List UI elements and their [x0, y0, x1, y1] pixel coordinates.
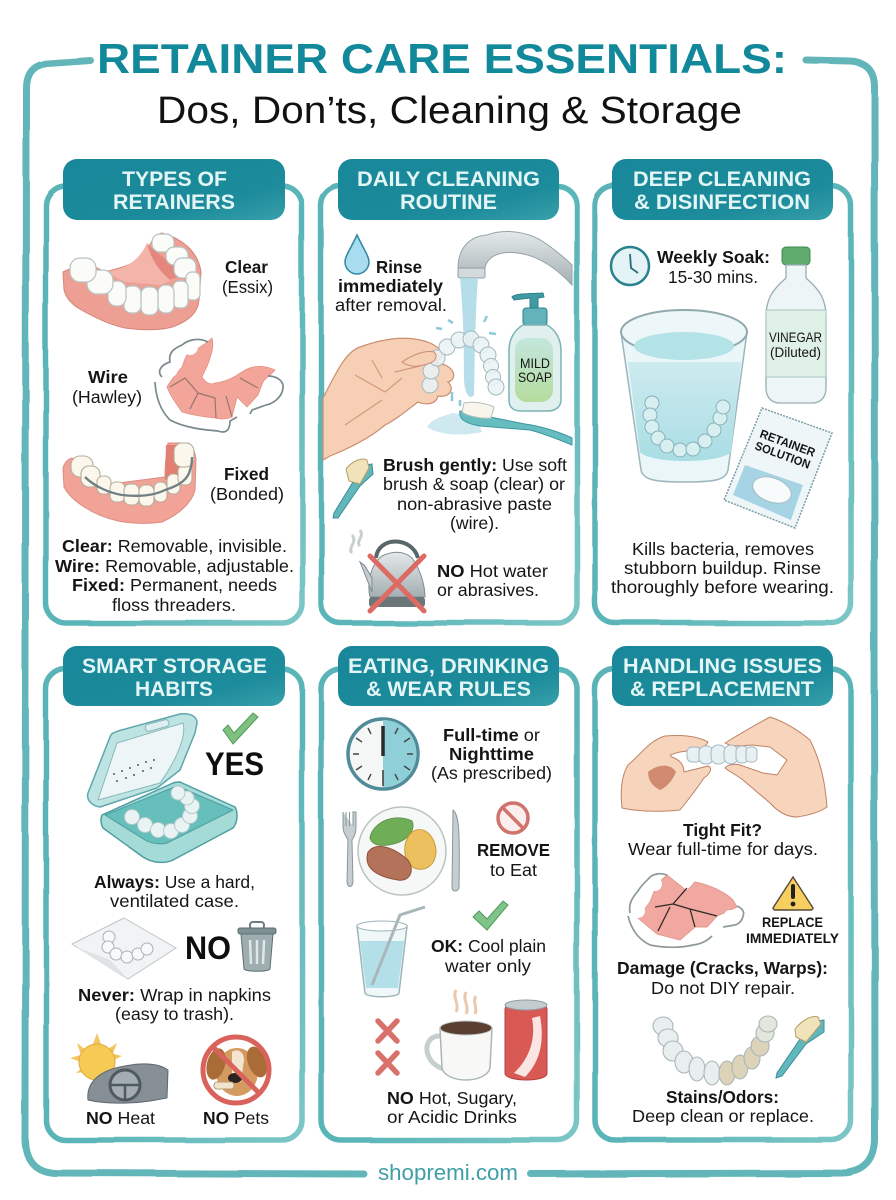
label: replace immediately: REPLACE [762, 915, 823, 930]
text: remove to eat: to Eat [490, 860, 537, 880]
text: damage: Damage (Cracks, Warps): [617, 958, 828, 978]
icon: fixed bonded retainer [63, 443, 196, 523]
text: tight fit: Tight Fit? [683, 820, 762, 840]
panel: deep cleaning and disinfection [595, 159, 851, 623]
heading: deep cleaning: DEEP CLEANING [633, 167, 811, 191]
text: retainer type summary [55, 536, 294, 615]
icon: open retainer case [88, 714, 237, 862]
text: never wrap in napkins: (easy to trash). [115, 1004, 234, 1024]
icon: prohibited sign [498, 803, 528, 833]
text: tight fit [628, 820, 818, 859]
heading: smart storage: SMART STORAGE [82, 654, 267, 678]
label: wire hawley: Wire [88, 367, 128, 387]
icon: faucet and running water [436, 232, 572, 406]
heading: daily cleaning routine: DAILY CLEANING [357, 167, 540, 191]
icon: vinegar bottle: VINEGAR [769, 329, 822, 345]
icon: sun over car dashboard [70, 1033, 168, 1103]
text: always use a hard case: ventilated case. [110, 891, 239, 911]
text: brush gently: non-abrasive paste [397, 494, 552, 514]
panel: daily cleaning routine [321, 159, 577, 623]
text: full-time or nighttime: Nighttime [449, 744, 534, 764]
icon: warning triangle [773, 877, 813, 910]
label: replace immediately [746, 915, 839, 946]
icon: water drop [345, 235, 369, 274]
heading: handling issues: HANDLING ISSUES [623, 654, 822, 678]
text: no hot water: NO Hot water [437, 561, 548, 581]
text: weekly soak [657, 247, 770, 287]
heading: handling issues: & REPLACEMENT [630, 677, 814, 701]
text: brush gently: brush & soap (clear) or [383, 474, 565, 494]
icon: coffee mug and soda can [427, 990, 547, 1080]
icon: no pets [202, 1036, 271, 1104]
text: damage [617, 958, 828, 998]
text: rinse immediately: after removal. [335, 295, 447, 315]
heading: eating drinking: EATING, DRINKING [348, 654, 549, 678]
icon: clear retainer held in hand [323, 331, 504, 460]
panel: eating drinking and wear rules [321, 646, 577, 1140]
text: brush gently: (wire). [450, 513, 499, 533]
heading: daily cleaning routine [357, 167, 540, 214]
heading: smart storage [82, 654, 267, 701]
label: fixed bonded: Fixed [224, 464, 269, 484]
text: weekly soak: 15-30 mins. [668, 267, 758, 287]
text: remove to eat [477, 840, 550, 880]
text: kills bacteria [611, 539, 834, 597]
icon: clock [611, 247, 649, 285]
text: no hot sugary drinks: NO Hot, Sugary, [387, 1088, 517, 1108]
label: clear essix: Clear [225, 257, 268, 277]
text: stains odors: Stains/Odors: [666, 1087, 779, 1107]
text: remove to eat: REMOVE [477, 840, 550, 860]
text: always use a hard case: Always: Use a hard, [94, 872, 255, 892]
icon: cracked retainer [628, 874, 744, 947]
icon: retainer solution sachet: RETAINER [758, 427, 818, 460]
icon: vinegar bottle: (Diluted) [770, 344, 821, 360]
icon: mild soap bottle: SOAP [518, 369, 552, 385]
icon: retainer solution sachet: SOLUTION [753, 439, 812, 472]
text: kills bacteria: Kills bacteria, removes [632, 539, 814, 559]
icon: retainer in napkin [72, 918, 176, 979]
label: fixed bonded: (Bonded) [210, 484, 284, 504]
text: never wrap in napkins [78, 985, 271, 1024]
heading: eating drinking: & WEAR RULES [366, 677, 531, 701]
heading: types of retainers [113, 167, 235, 214]
text: no hot water: or abrasives. [437, 580, 539, 600]
icon: kettle crossed out [351, 530, 425, 611]
text: always use a hard case [94, 872, 255, 911]
heading: types of retainers: RETAINERS [113, 190, 235, 214]
text: stains odors: Deep clean or replace. [632, 1106, 814, 1126]
icon: half-shaded wall clock [348, 719, 418, 789]
label: wire hawley: (Hawley) [72, 387, 142, 407]
text: brush gently: Brush gently: Use soft [383, 455, 567, 475]
icon: green check [223, 713, 258, 744]
label: clear essix [222, 257, 273, 297]
text: kills bacteria: stubborn buildup. Rinse [624, 558, 821, 578]
icon: mild soap bottle: MILD [520, 355, 550, 371]
icon: cup with soaking retainer [621, 310, 747, 482]
label: fixed bonded [210, 464, 284, 504]
text: full-time or nighttime [431, 725, 552, 783]
text: retainer type summary: Fixed: Permanent, needs [72, 575, 277, 595]
icon: vinegar bottle [766, 247, 826, 403]
label: clear essix: (Essix) [222, 277, 273, 297]
icon: trash can [238, 922, 276, 971]
label: yes: YES [205, 746, 264, 782]
text: ok cool plain water [431, 936, 546, 976]
text: retainer type summary: Wire: Removable, adjustable. [55, 556, 294, 576]
text: no hot sugary drinks: or Acidic Drinks [387, 1107, 517, 1127]
text: no hot water [437, 561, 548, 600]
title: Dos, Don’ts, Cleaning & Storage [157, 90, 742, 132]
icon: hands holding retainer [621, 717, 827, 817]
title [97, 35, 787, 132]
heading: smart storage: HABITS [135, 677, 213, 701]
icon: stained retainer [653, 1016, 777, 1085]
text: rinse immediately [335, 257, 447, 315]
heading: types of retainers: TYPES OF [122, 167, 227, 191]
heading: eating drinking [348, 654, 549, 701]
text: never wrap in napkins: Never: Wrap in napkins [78, 985, 271, 1005]
heading: daily cleaning routine: ROUTINE [400, 190, 497, 214]
label: wire hawley [72, 367, 142, 407]
label: no heat: NO Heat [86, 1108, 155, 1128]
icon: plate with meal and cutlery [343, 807, 459, 895]
text: damage: Do not DIY repair. [651, 978, 795, 998]
label: no pets: NO Pets [203, 1108, 269, 1128]
text: ok cool plain water: OK: Cool plain [431, 936, 546, 956]
text: retainer type summary: Clear: Removable, invisible. [62, 536, 287, 556]
icon: small brush [333, 459, 373, 518]
icon: toothbrush with puddle [427, 402, 572, 445]
panel: types of retainers [46, 159, 302, 623]
text: retainer type summary: floss threaders. [112, 595, 236, 615]
panel: smart storage habits [46, 646, 302, 1140]
icon: retainer solution sachet [724, 408, 832, 528]
icon: mild soap bottle [509, 293, 561, 411]
text: full-time or nighttime: Full-time or [443, 725, 540, 745]
panel: handling issues and replacement [595, 646, 851, 1140]
heading: deep cleaning [633, 167, 811, 214]
text: brush gently [383, 455, 567, 533]
text: weekly soak: Weekly Soak: [657, 247, 770, 267]
icon: clear retainer on model [63, 233, 201, 330]
heading: deep cleaning: & DISINFECTION [634, 190, 810, 214]
title: RETAINER CARE ESSENTIALS: [97, 35, 787, 82]
icon: red crosses [378, 1021, 397, 1073]
icon: check mark [473, 901, 508, 930]
text: ok cool plain water: water only [444, 956, 531, 976]
icon: small teal toothbrush [776, 1017, 824, 1078]
text: tight fit: Wear full-time for days. [628, 839, 818, 859]
text: kills bacteria: thoroughly before wearing. [611, 577, 834, 597]
text: rinse immediately: Rinse [376, 257, 422, 277]
text: stains odors [632, 1087, 814, 1126]
label: replace immediately: IMMEDIATELY [746, 931, 839, 946]
icon: wire hawley retainer [155, 338, 283, 432]
icon: glass of water with straw [357, 907, 425, 997]
footer: website: shopremi.com [378, 1160, 518, 1185]
heading: handling issues [623, 654, 822, 701]
text: no hot sugary drinks [387, 1088, 517, 1127]
label: no: NO [185, 930, 231, 966]
text: full-time or nighttime: (As prescribed) [431, 763, 552, 783]
text: rinse immediately: immediately [338, 276, 443, 296]
